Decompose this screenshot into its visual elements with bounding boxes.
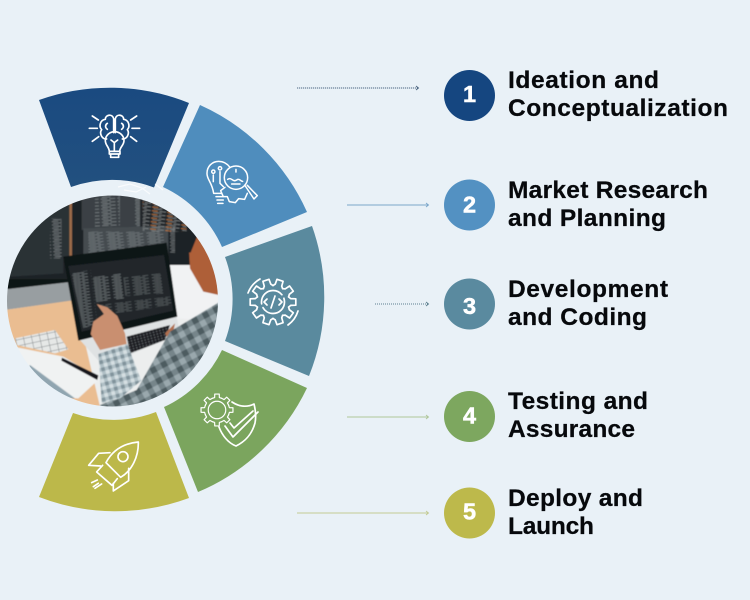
monitors background [9, 200, 192, 280]
step 5: Launch [508, 513, 594, 540]
shirt [100, 302, 227, 410]
step 2: Market Research [508, 177, 708, 204]
step 1: Ideation and [508, 67, 659, 94]
segment ring [39, 88, 324, 511]
connector arrow 2 [347, 203, 428, 207]
segment 1: ideation [39, 88, 189, 188]
icon: code gear [248, 279, 298, 325]
connector arrow 5 [297, 511, 428, 515]
segment 2: market research [163, 105, 307, 247]
step 3 [444, 276, 668, 331]
connector arrow 1 [297, 86, 418, 90]
icon: bulb, gear and magnifier [207, 161, 257, 203]
step 1: Conceptualization [508, 95, 728, 122]
step 2: 2 [463, 192, 476, 218]
step 4 [444, 388, 648, 443]
faint gear above photo [118, 184, 163, 194]
segment 5: deploy [39, 412, 189, 511]
connector arrow 4 [347, 415, 428, 419]
step 5 [444, 485, 643, 540]
icon: rocket [89, 442, 138, 491]
step 3: 3 [463, 293, 476, 319]
head [188, 236, 218, 296]
segment 4: testing [164, 350, 307, 492]
desk and wall [0, 282, 73, 311]
step 1 [444, 67, 728, 122]
icon: brain light bulb [89, 115, 140, 157]
icon: gear and shield check [201, 394, 258, 446]
step 4: 4 [463, 402, 476, 428]
step 4: Assurance [508, 416, 635, 443]
connector arrow 3 [375, 302, 428, 306]
step 2: and Planning [508, 205, 666, 232]
step 1: 1 [463, 81, 476, 107]
laptop [80, 317, 180, 361]
segment 3: development [225, 226, 324, 376]
step 5: Deploy and [508, 485, 643, 512]
step 4: Testing and [508, 388, 648, 415]
step 3: Development [508, 276, 668, 303]
photo: developer at laptop [7, 196, 218, 406]
papers and keyboard [13, 347, 100, 398]
step 5: 5 [463, 498, 476, 524]
hand [91, 304, 127, 350]
step 3: and Coding [508, 304, 647, 331]
step 2 [444, 177, 708, 232]
